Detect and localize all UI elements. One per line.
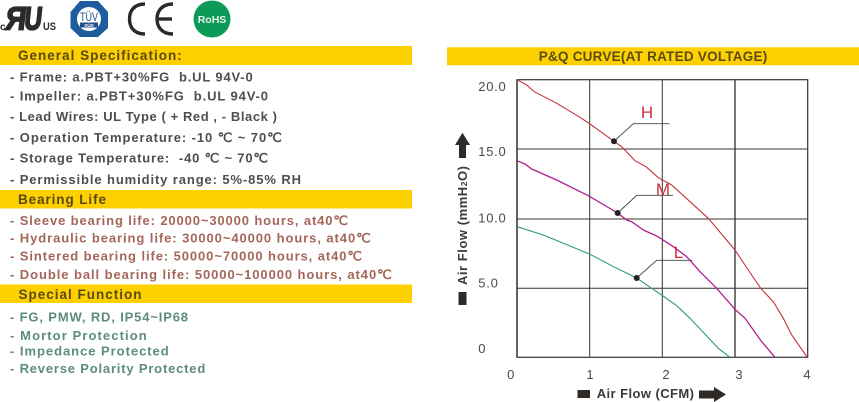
special function list: - FG, PMW, RD, IP54~IP68 [10, 310, 188, 325]
curve M [517, 161, 775, 357]
x axis tick labels: 0 [507, 367, 514, 382]
special function list [10, 310, 205, 376]
icon: UR mark: c [0, 22, 6, 33]
callout M [615, 180, 673, 216]
bearing life list: - Sintered bearing life: 50000~70000 hours, at40℃ [10, 249, 362, 264]
x axis title [578, 386, 726, 402]
panel: bearing life [0, 190, 412, 282]
bearing life list: - Sleeve bearing life: 20000~30000 hours, at40℃ [10, 213, 348, 228]
y axis tick labels: 0 [478, 341, 486, 356]
y axis title [455, 133, 470, 305]
y axis tick labels: 10.0 [478, 210, 506, 225]
specification list: - Lead Wires: UL Type ( + Red , - Black ) [10, 109, 277, 124]
x axis tick labels: 1 [586, 367, 594, 382]
heading bar: special function: Special Function [18, 287, 142, 302]
curve H [517, 80, 807, 357]
icon: UR mark: U [23, 1, 44, 37]
icon: RoHS badge: RoHS [198, 14, 226, 26]
heading bar: P&Q curve [447, 47, 859, 65]
specification list: - Frame: a.PBT+30%FG b.UL 94V-0 [10, 70, 253, 84]
icon: UR mark [0, 1, 56, 37]
specification list: - Permissible humidity range: 5%-85% RH [10, 172, 301, 187]
icon: UR mark: R [4, 1, 29, 37]
callout H [611, 103, 669, 144]
icon: UR mark: US [43, 21, 56, 33]
icon: TUV badge: TÜV [80, 12, 98, 24]
specification list [10, 70, 301, 187]
callout M: M [656, 180, 670, 199]
x axis tick labels: 2 [662, 367, 670, 382]
panel: general specification [0, 46, 412, 187]
icon: TUV badge [70, 1, 108, 37]
callout H: H [641, 103, 653, 122]
y axis tick labels: 15.0 [478, 144, 506, 159]
y axis tick labels [478, 79, 506, 356]
specification list: - Operation Temperature: -10 ℃ ~ 70℃ [10, 130, 282, 145]
x axis tick labels: 4 [803, 367, 811, 382]
y axis tick labels: 5.0 [478, 276, 498, 291]
special function list: - Mortor Protection [10, 328, 147, 343]
specification list: - Impeller: a.PBT+30%FG b.UL 94V-0 [10, 89, 268, 104]
callout L: L [674, 243, 683, 262]
special function list: - Impedance Protected [10, 344, 169, 359]
y axis tick labels: 20.0 [478, 79, 506, 94]
icon: UR mark: ® [37, 7, 41, 14]
icon: CE mark [130, 4, 173, 34]
heading bar: general specification: General Specification: [18, 48, 182, 63]
icon: TUV badge: SÜD [84, 22, 94, 28]
bearing life list: - Double ball bearing life: 50000~100000 hours, at40℃ [10, 267, 392, 282]
chart grid [517, 80, 808, 357]
y axis title: Air Flow (mmH2O) [455, 166, 470, 285]
callout L [634, 243, 692, 281]
heading bar: bearing life: Bearing Life [18, 192, 106, 207]
icon: RoHS badge [194, 0, 230, 38]
heading bar: P&Q curve: P&Q CURVE(AT RATED VOLTAGE) [539, 49, 767, 64]
bearing life list: - Hydraulic bearing life: 30000~40000 hours, at40℃ [10, 231, 371, 246]
x axis tick labels: 3 [735, 367, 743, 382]
certification logos [0, 0, 230, 38]
heading bar: special function [0, 284, 412, 303]
panel: P&Q curve [447, 47, 859, 402]
panel: special function [0, 284, 412, 376]
heading bar: bearing life [0, 190, 412, 208]
x axis title: Air Flow (CFM) [597, 386, 694, 401]
heading bar: general specification [0, 46, 412, 65]
specification list: - Storage Temperature: -40 ℃ ~ 70℃ [10, 151, 268, 166]
special function list: - Reverse Polarity Protected [10, 361, 205, 376]
curve L [517, 227, 730, 357]
bearing life list [10, 213, 392, 282]
x axis tick labels [507, 367, 811, 382]
